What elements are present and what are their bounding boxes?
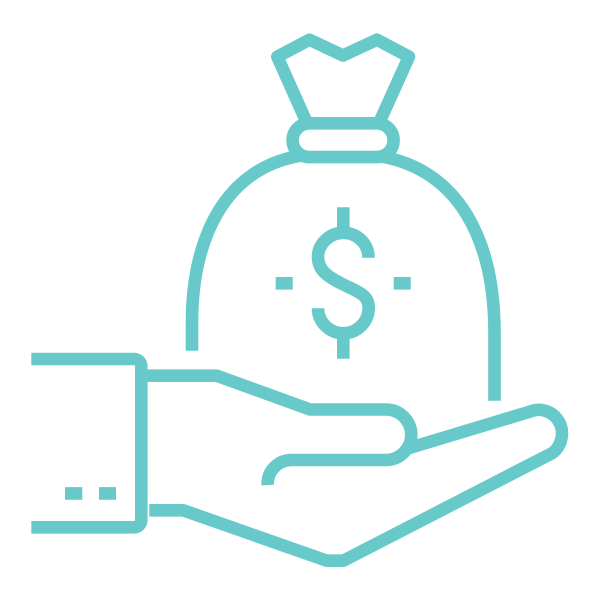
bag knot top — [277, 40, 409, 122]
bag body outline left — [192, 155, 305, 351]
cuff button right — [99, 487, 116, 500]
dollar left tick — [276, 277, 293, 290]
dollar top bar — [337, 207, 350, 228]
dollar S curve — [318, 233, 369, 333]
bag body outline right — [372, 155, 494, 401]
arm top and folded finger — [147, 376, 411, 485]
palm and extended fingers — [149, 410, 562, 561]
bag tie ring — [293, 123, 394, 157]
shirt cuff — [31, 359, 141, 527]
dollar right tick — [394, 277, 411, 290]
icon: dollar sign — [276, 207, 411, 359]
dollar bottom bar — [337, 338, 350, 359]
cuff button left — [65, 487, 82, 500]
icon: open hand with cuff — [31, 359, 562, 561]
icon: money bag — [192, 40, 494, 401]
